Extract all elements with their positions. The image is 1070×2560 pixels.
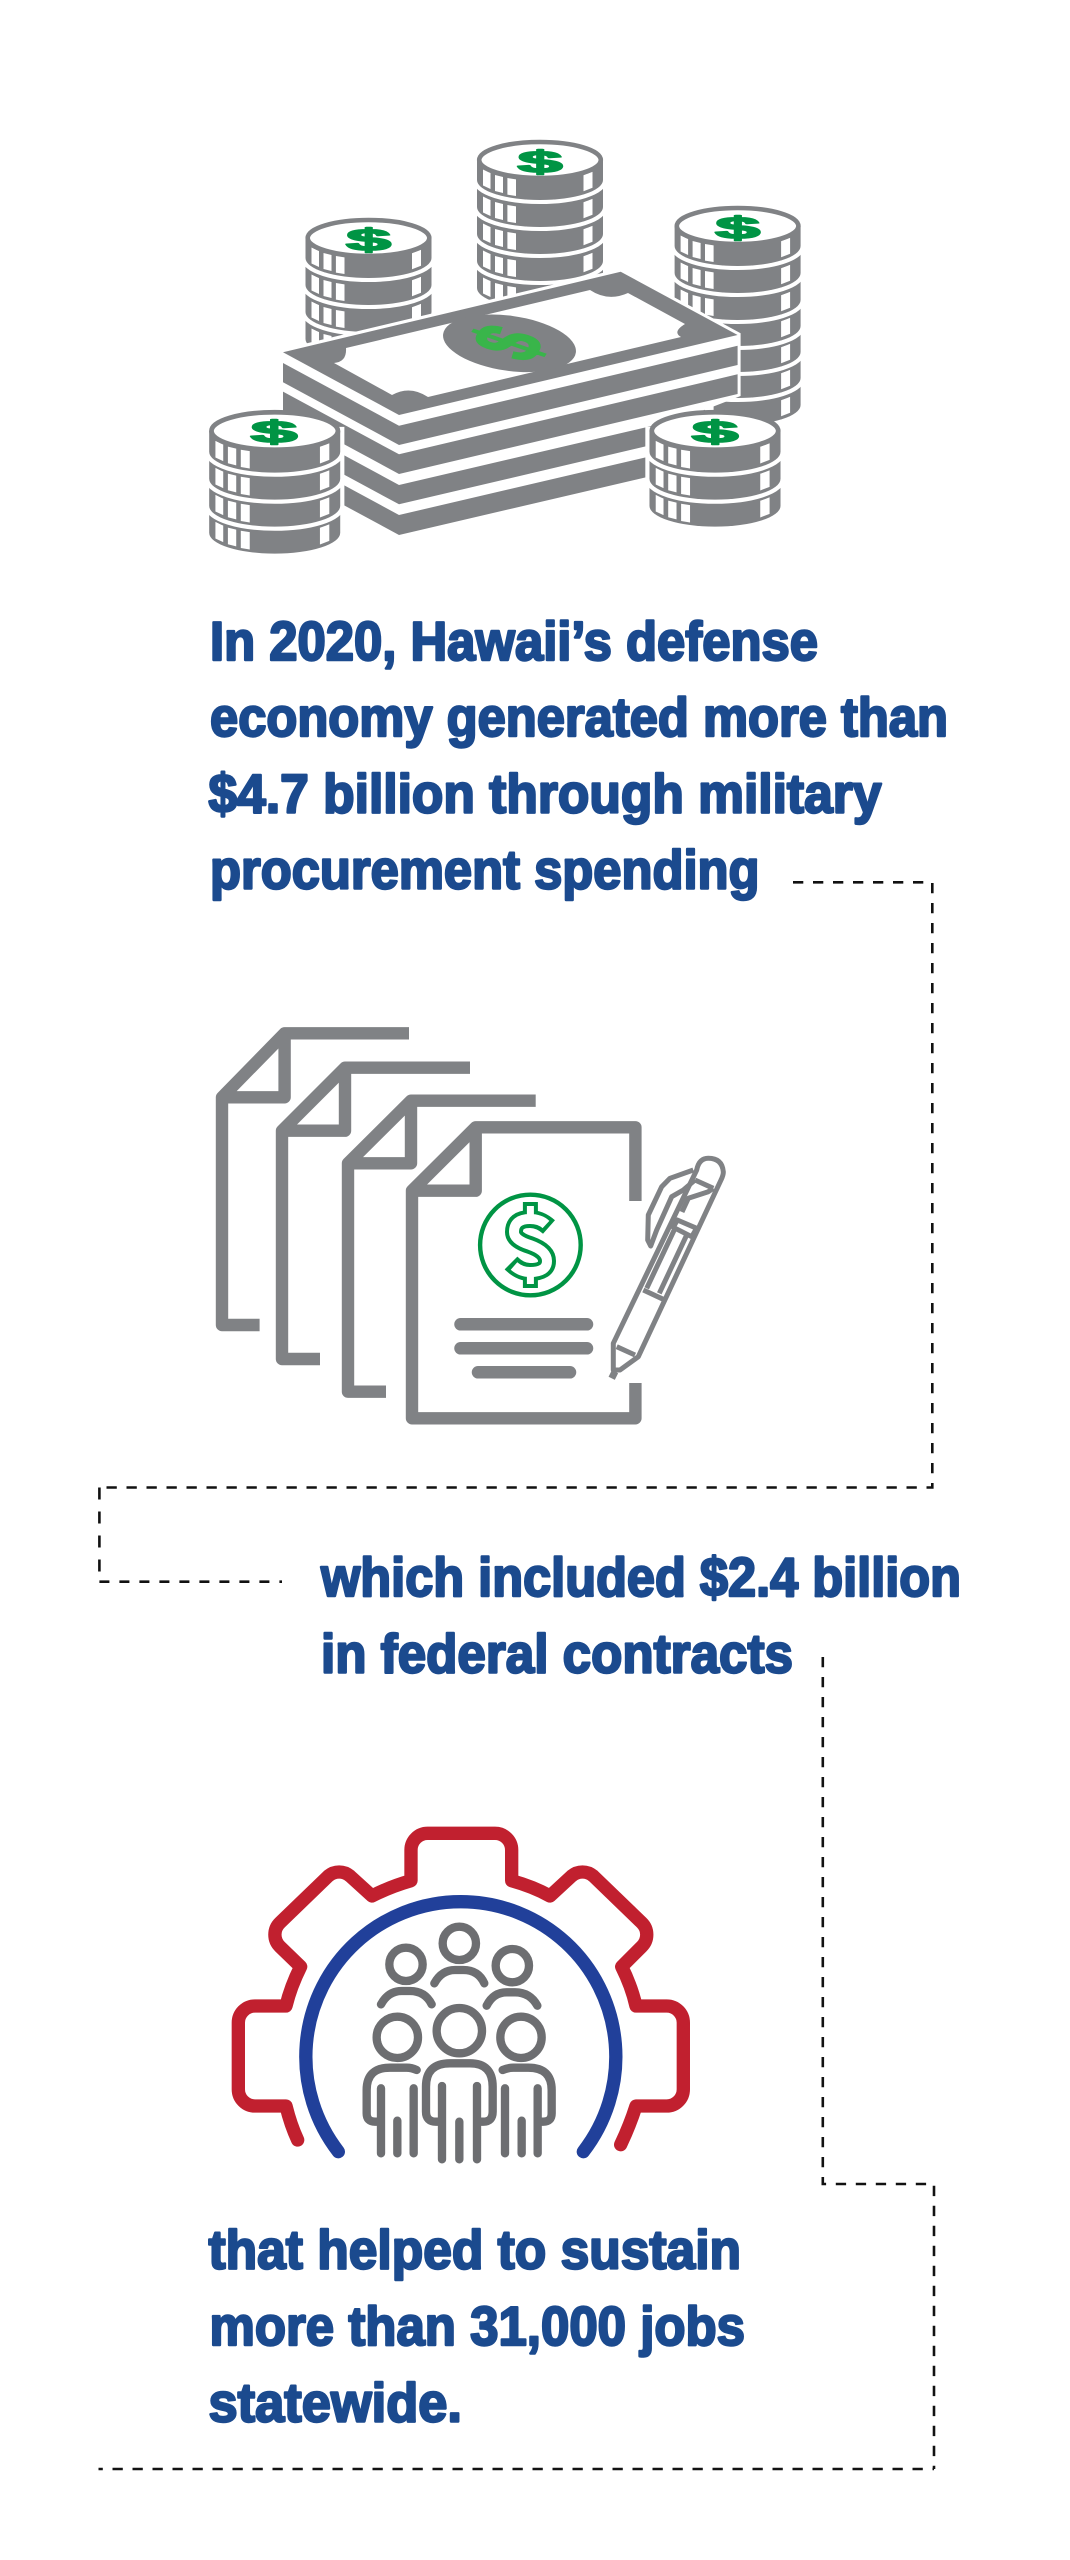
coin stack: front left: $ <box>251 414 297 449</box>
text: federal contracts statement: in federal contracts <box>321 1623 793 1685</box>
coin stack: front right: $ <box>692 414 738 449</box>
document 4 <box>412 1127 635 1418</box>
document 3 <box>348 1101 536 1392</box>
coin stack: back right <box>675 208 801 425</box>
blue arc <box>306 1902 616 2152</box>
document 1 <box>222 1033 409 1325</box>
icon: pen <box>612 1158 723 1378</box>
text: jobs statement: that helped to sustain <box>208 2219 741 2281</box>
text: federal contracts statement <box>320 1546 961 1685</box>
group of people <box>367 1927 552 2159</box>
coin stack: back centre <box>477 142 603 308</box>
coin stack: back centre: $ <box>518 144 562 179</box>
icon: money stack and coins <box>209 142 801 554</box>
text: jobs statement: more than 31,000 jobs <box>210 2295 745 2357</box>
stack of banknotes <box>283 272 738 535</box>
coin stack: front right <box>649 412 781 527</box>
text: jobs statement: statewide. <box>208 2372 462 2434</box>
text: procurement spending statement: In 2020, Hawaii’s defense <box>210 610 818 672</box>
document text lines <box>460 1324 587 1372</box>
coin stack: front left <box>209 412 340 554</box>
text: federal contracts statement: which included $2.4 billion <box>320 1546 961 1608</box>
document 2 <box>282 1068 470 1359</box>
gear outline <box>238 1833 683 2145</box>
text: jobs statement <box>208 2219 745 2434</box>
coin stack: back left <box>306 220 432 359</box>
text: procurement spending statement: economy generated more than <box>210 686 948 748</box>
text: procurement spending statement: $4.7 billion through military <box>208 762 882 824</box>
text: procurement spending statement: procurement spending <box>210 838 760 900</box>
dashed connector: second text to bottom <box>98 1657 934 2469</box>
icon: contract documents with pen <box>222 1033 723 1418</box>
text: procurement spending statement <box>208 610 948 900</box>
icon: green dollar circle <box>480 1195 581 1295</box>
coin stack: back right: $ <box>715 210 760 245</box>
dashed connector: first text to second text <box>99 882 932 1582</box>
coin stack: back left: $ <box>346 222 391 257</box>
stack of banknotes: $ <box>450 314 565 371</box>
icon: workforce inside gear <box>238 1833 683 2159</box>
